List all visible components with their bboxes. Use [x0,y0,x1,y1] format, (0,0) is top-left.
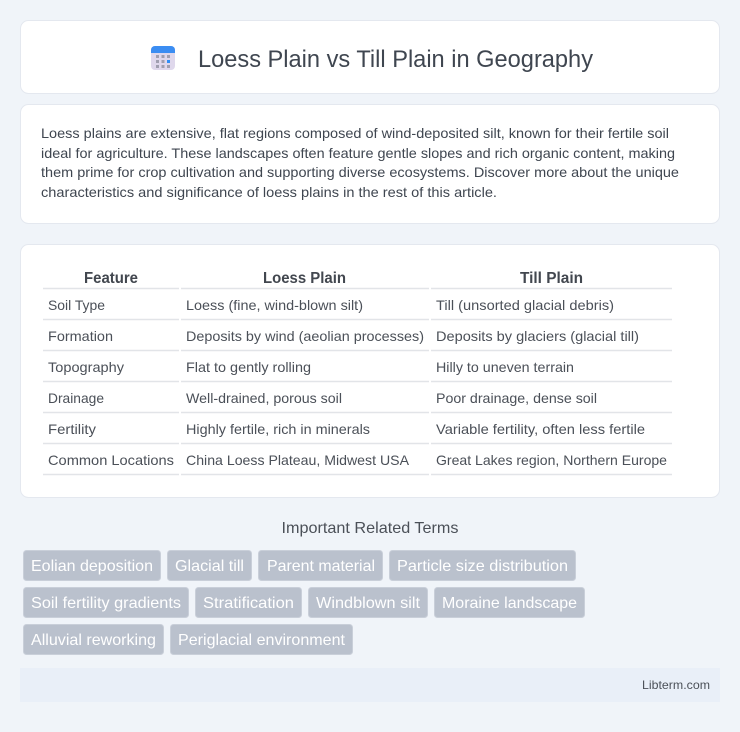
related term tags: Alluvial reworking [31,632,156,649]
icon: calendar [151,46,175,70]
related term tags: Eolian deposition [31,558,153,575]
table rows: Soil Type [48,297,105,313]
table rows: Poor drainage, dense soil [436,390,597,406]
related term tags: Moraine landscape [442,595,577,612]
table header: Loess Plain [263,270,346,287]
table rows: Drainage [48,390,104,406]
table header [84,270,583,287]
panel: intro paragraph: ideal for agriculture. These landscapes often feature gentle slopes and rich organic content, making [41,145,675,161]
footer [20,668,720,702]
table rows: China Loess Plateau, Midwest USA [186,452,410,468]
related term tags: Windblown silt [316,595,421,612]
panel: intro paragraph: Loess plains are extensive, flat regions composed of wind-deposited silt, known for their fertile soil [41,125,669,141]
table rows: Fertility [48,421,96,437]
panel: comparison table [20,244,720,498]
table rows: Variable fertility, often less fertile [436,421,645,437]
table rows: Great Lakes region, Northern Europe [436,452,667,468]
related term tags: Parent material [267,558,375,575]
table header: Feature [84,270,138,287]
footer: Libterm.com [642,678,710,692]
table rows: Till (unsorted glacial debris) [436,297,614,313]
panel: intro paragraph: them prime for crop cultivation and supporting diverse ecosystems. Discover more about the unique [41,164,679,180]
panel: title header [20,20,720,94]
table rows: Formation [48,328,113,344]
panel: intro paragraph [20,104,720,224]
table rows: Common Locations [48,452,174,468]
table rows: Deposits by wind (aeolian processes) [186,328,424,344]
table rows [43,288,672,474]
table rows: Flat to gently rolling [186,359,311,375]
title: Loess Plain vs Till Plain in Geography [198,46,593,73]
table rows: Highly fertile, rich in minerals [186,421,370,437]
table rows: Loess (fine, wind-blown silt) [186,297,363,313]
related term tags: Periglacial environment [178,632,346,649]
table rows: Hilly to uneven terrain [436,359,574,375]
related term tags [24,550,584,654]
related term tags: Glacial till [175,558,244,575]
panel: intro paragraph: characteristics and significance of loess plains in the rest of this article. [41,184,497,200]
heading: related terms: Important Related Terms [282,520,458,537]
table rows: Deposits by glaciers (glacial till) [436,328,639,344]
table rows: Well-drained, porous soil [186,390,342,406]
table rows: Topography [48,359,124,375]
related term tags: Soil fertility gradients [31,595,181,612]
table header: Till Plain [520,270,583,287]
related term tags: Particle size distribution [397,558,568,575]
related term tags: Stratification [203,595,294,612]
